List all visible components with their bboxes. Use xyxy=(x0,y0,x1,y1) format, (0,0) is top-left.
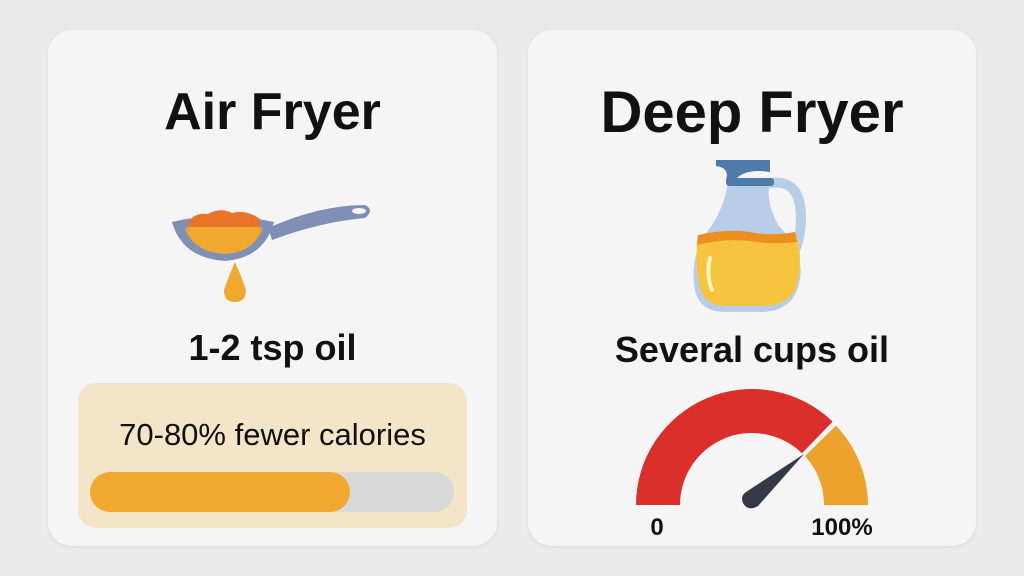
icon: oil jug xyxy=(693,160,806,312)
bar chart: calories xyxy=(90,472,454,512)
callout: calories xyxy=(78,383,467,528)
title: air fryer: Air Fryer xyxy=(164,83,381,141)
label: 100%: 100% xyxy=(811,514,873,541)
chart: gauge xyxy=(636,389,873,541)
title: deep fryer: Deep Fryer xyxy=(600,80,904,145)
panel: air fryer xyxy=(48,30,497,546)
text: oil amount: 1-2 tsp oil xyxy=(188,327,357,368)
label: 0: 0 xyxy=(650,514,664,541)
icon: spoon with oil drop xyxy=(172,205,370,302)
text: fewer calories: 70-80% fewer calories xyxy=(119,417,426,452)
panel: deep fryer xyxy=(528,30,976,546)
text: oil amount: Several cups oil xyxy=(615,329,889,370)
